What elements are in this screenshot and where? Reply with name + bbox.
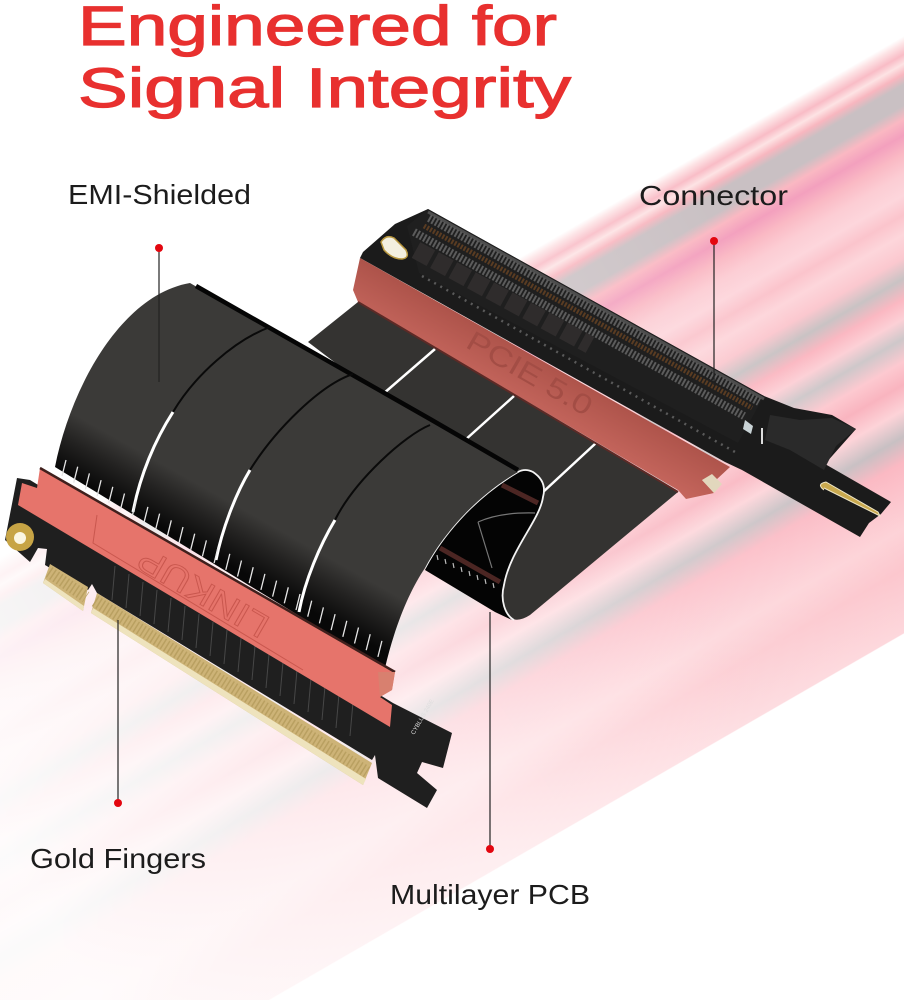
bracket hole: [381, 237, 407, 259]
traces: [112, 566, 353, 736]
engraved LINKUP logo: LINKUP: [131, 539, 276, 645]
board markings: CYBLUS 240E: [411, 699, 436, 736]
callout: Multilayer PCB: [390, 612, 590, 910]
lower circuit board: [5, 478, 452, 808]
callout: Gold Fingers: [30, 620, 206, 874]
slot in finger tab: [820, 482, 880, 516]
ribbon seams: [173, 327, 430, 520]
title: [78, 0, 571, 119]
ribbon fold opening: [425, 470, 544, 620]
connector slot: [407, 209, 764, 452]
upper connector board: [360, 209, 891, 537]
retention latch: [743, 415, 856, 470]
callout: EMI-Shielded: [68, 179, 251, 382]
engraved LINKUP logo: [93, 515, 303, 670]
callout: Multilayer PCB: Multilayer PCB: [390, 879, 590, 910]
white ribbon cable ticks: [62, 460, 382, 657]
flat rear ribbon: [308, 302, 678, 620]
engraved PCIE 5.0 text: PCIE 5.0: [461, 325, 598, 422]
front curved ribbon EMI shield: [55, 283, 518, 668]
callout: Connector: [639, 180, 788, 385]
callout: Connector: Connector: [639, 180, 788, 211]
mounting hole: [6, 523, 34, 551]
upper pink cover: [353, 258, 730, 499]
lower pink cover: [18, 468, 395, 727]
riser cable assembly: [5, 209, 891, 808]
callout: EMI-Shielded: EMI-Shielded: [68, 179, 251, 210]
bracket plate and finger tabs: [360, 209, 891, 537]
gold fingers: [43, 564, 372, 785]
callout: Gold Fingers: Gold Fingers: [30, 843, 206, 874]
title: Signal Integrity: [78, 56, 571, 119]
